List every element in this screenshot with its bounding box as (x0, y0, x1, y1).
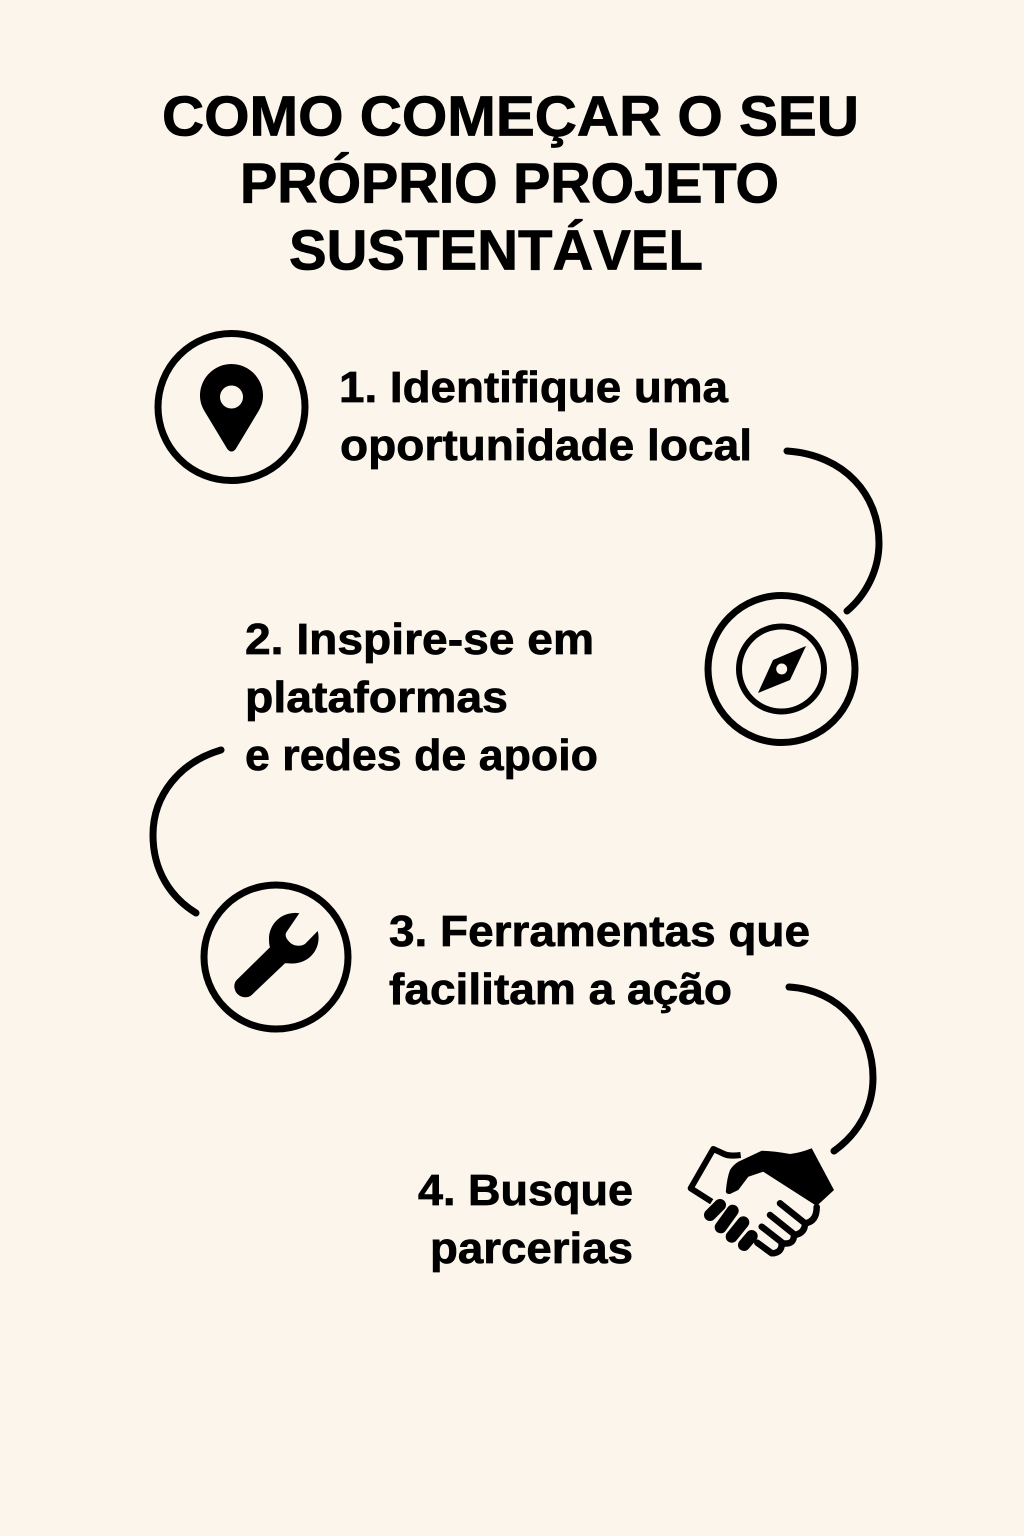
step 3 text (389, 907, 810, 1014)
step 4 text: 4. Busque (418, 1166, 633, 1215)
step 3 text: facilitam a ação (389, 965, 732, 1014)
step 2 text (245, 615, 598, 780)
title (162, 84, 859, 282)
icon: compass in circle (708, 596, 855, 742)
step 2 text: plataformas (245, 673, 508, 722)
arrow: step 3 to step 4 (789, 987, 873, 1151)
step 1 text (339, 363, 752, 470)
title: PRÓPRIO PROJETO (240, 152, 779, 216)
step 1 text: oportunidade local (340, 421, 752, 470)
icon: wrench in circle (204, 885, 348, 1029)
step 1 text: 1. Identifique uma (339, 363, 729, 412)
icon: location pin in circle (158, 334, 305, 480)
arrow: step 2 to step 3 (153, 750, 221, 913)
title: SUSTENTÁVEL (289, 218, 703, 282)
step 4 text: parcerias (430, 1224, 633, 1273)
arrow: step 1 to step 2 (787, 451, 879, 611)
step 2 text: e redes de apoio (245, 731, 598, 780)
step 3 text: 3. Ferramentas que (389, 907, 810, 956)
title: COMO COMEÇAR O SEU (162, 84, 859, 148)
step 4 text (418, 1166, 633, 1273)
icon: handshake (691, 1148, 834, 1253)
step 2 text: 2. Inspire-se em (245, 615, 594, 664)
